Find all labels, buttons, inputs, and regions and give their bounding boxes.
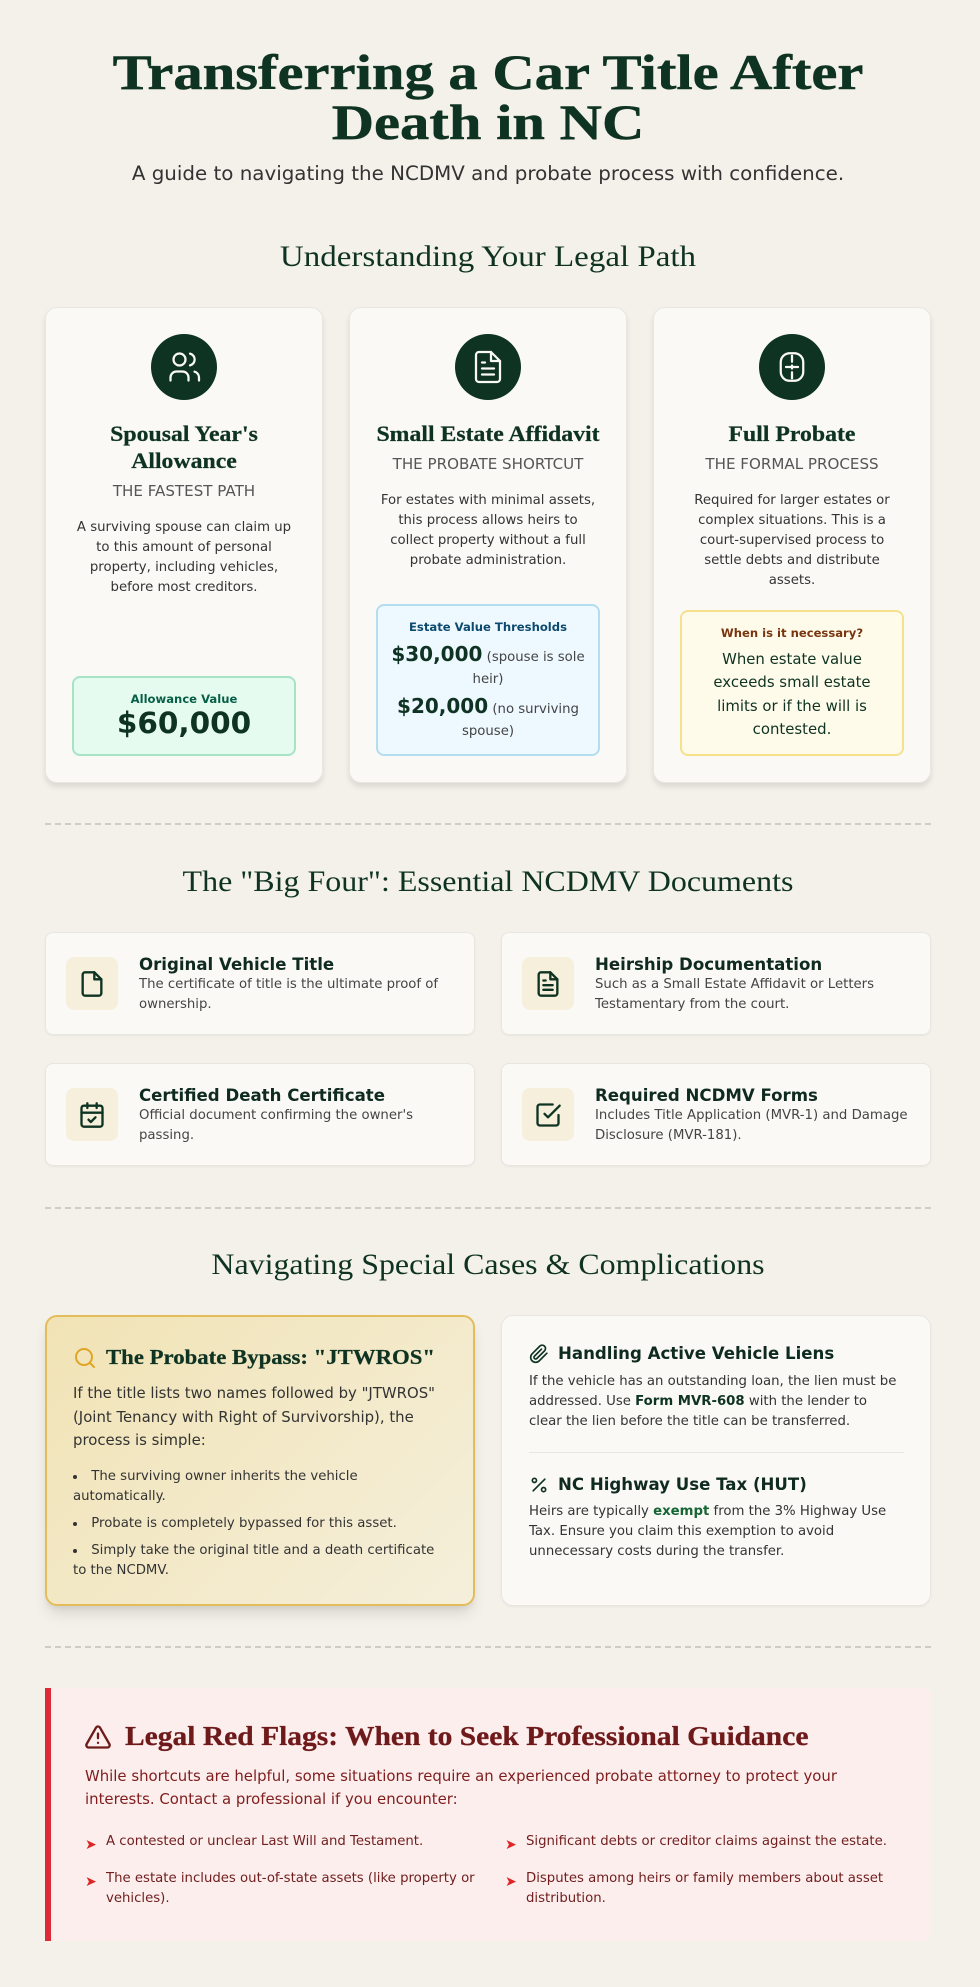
document name: Original Vehicle Title: [139, 955, 334, 974]
panel: spousal year's allowance: [45, 307, 323, 783]
flag text: [526, 1871, 883, 1906]
bullet list: automatically.: [73, 1489, 166, 1504]
callout: allowance value: [72, 676, 296, 756]
callout text: [713, 650, 871, 738]
title: [113, 44, 863, 150]
threshold: spouse: $30,000 (spouse is sole: [391, 642, 585, 666]
flag text: distribution.: [526, 1891, 606, 1906]
liens text: If the vehicle has an outstanding loan, the lien must be: [529, 1374, 896, 1389]
panel: original vehicle title: [45, 932, 475, 1035]
intro text: [85, 1767, 837, 1808]
arrow: ➤: [505, 1874, 517, 1890]
heading: legal path: Understanding Your Legal Path: [280, 240, 696, 273]
card description: For estates with minimal assets,: [381, 493, 595, 508]
card description: A surviving spouse can claim up: [77, 520, 291, 535]
card description: complex situations. This is a: [698, 513, 886, 528]
card description: assets.: [769, 573, 815, 588]
callout label: Allowance Value: [131, 692, 237, 706]
card heading: [110, 421, 258, 473]
callout amount: $60,000: [117, 706, 251, 740]
document name: Heirship Documentation: [595, 955, 822, 974]
document name: Required NCDMV Forms: [595, 1086, 818, 1105]
card description: to this amount of personal: [96, 540, 272, 555]
title: Transferring a Car Title After: [113, 44, 863, 100]
icon: paperclip: [530, 1344, 548, 1364]
card subtitle: THE FORMAL PROCESS: [705, 455, 879, 473]
callout text: exceeds small estate: [713, 673, 871, 691]
threshold: spouse: [391, 642, 585, 686]
card heading: Full Probate: [729, 421, 855, 446]
document description: [594, 977, 874, 1012]
icon: file: [66, 957, 118, 1010]
heading: big four: The "Big Four": Essential NCDMV Documents: [183, 865, 793, 898]
document description: Disclosure (MVR-181).: [595, 1128, 742, 1143]
card subtitle: THE FASTEST PATH: [113, 482, 255, 500]
title: Death in NC: [332, 94, 644, 150]
flag text: vehicles).: [106, 1891, 170, 1906]
flag text: Significant debts or creditor claims against the estate.: [526, 1834, 887, 1849]
document description: The certificate of title is the ultimate proof of: [139, 977, 438, 992]
document description: Includes Title Application (MVR-1) and Damage: [595, 1108, 908, 1123]
bullet list: Probate is completely bypassed for this asset.: [91, 1516, 397, 1531]
card description: [694, 493, 890, 588]
panel: liens and tax: [501, 1315, 931, 1606]
document description: passing.: [139, 1128, 194, 1143]
icon: warning triangle: [85, 1725, 111, 1749]
document description: Testamentary from the court.: [595, 997, 789, 1012]
bullet list: Simply take the original title and a death certificate: [91, 1543, 434, 1558]
panel: JTWROS bypass: [45, 1315, 475, 1606]
icon: search: [75, 1348, 95, 1368]
flag text: A contested or unclear Last Will and Testament.: [106, 1834, 423, 1849]
threshold: no spouse: $20,000 (no surviving: [397, 694, 579, 718]
flag text: The estate includes out-of-state assets (like property or: [106, 1871, 475, 1886]
callout: estate value thresholds: [376, 604, 600, 756]
red flag: disputes: [505, 1871, 883, 1906]
document description: [138, 977, 438, 1012]
card heading: Spousal Year's: [110, 421, 258, 446]
subtitle: A guide to navigating the NCDMV and probate process with confidence.: [132, 162, 844, 185]
panel: full probate: [653, 307, 931, 783]
liens text: addressed. Use Form MVR-608 with the lender to: [529, 1394, 867, 1409]
panel: small estate affidavit: [349, 307, 627, 783]
red flag: debts: [505, 1834, 887, 1853]
intro text: (Joint Tenancy with Right of Survivorship), the: [73, 1408, 414, 1426]
liens text: [529, 1374, 896, 1429]
bullet list: The surviving owner inherits the vehicle: [91, 1469, 358, 1484]
card description: before most creditors.: [111, 580, 257, 595]
threshold: spouse: heir): [473, 672, 503, 686]
panel heading: The Probate Bypass: "JTWROS": [106, 1345, 435, 1369]
document description: Such as a Small Estate Affidavit or Letters: [595, 977, 874, 992]
icon: formal process: [759, 334, 825, 400]
heading: special cases: Navigating Special Cases & Complications: [211, 1248, 765, 1281]
callout text: contested.: [753, 720, 831, 738]
panel heading: Legal Red Flags: When to Seek Professional Guidance: [125, 1721, 808, 1751]
card description: settle debts and distribute: [704, 553, 880, 568]
icon: percent: [532, 1478, 546, 1492]
card description: court-supervised process to: [700, 533, 884, 548]
card description: probate administration.: [410, 553, 566, 568]
intro text: If the title lists two names followed by "JTWROS": [73, 1384, 435, 1402]
tax text: Tax. Ensure you claim this exemption to avoid: [529, 1524, 834, 1539]
panel: death certificate: [45, 1063, 475, 1166]
document description: Official document confirming the owner's: [139, 1108, 413, 1123]
card heading: Allowance: [131, 448, 237, 473]
callout label: Estate Value Thresholds: [409, 620, 567, 634]
intro text: interests. Contact a professional if you encounter:: [85, 1790, 458, 1808]
card description: collect property without a full: [390, 533, 586, 548]
tax text: Heirs are typically exempt from the 3% Highway Use: [529, 1504, 886, 1519]
liens heading: Handling Active Vehicle Liens: [558, 1344, 834, 1363]
threshold: no spouse: spouse): [462, 724, 514, 739]
tax heading: NC Highway Use Tax (HUT): [558, 1475, 807, 1494]
icon: check square: [522, 1088, 574, 1141]
card description: this process allows heirs to: [398, 513, 578, 528]
arrow: ➤: [505, 1837, 517, 1853]
icon: users: [151, 334, 217, 400]
intro text: [73, 1384, 435, 1449]
card description: [77, 520, 291, 595]
arrow: ➤: [85, 1874, 97, 1890]
bullet list: to the NCDMV.: [73, 1563, 169, 1578]
red flag: out-of-state assets: [85, 1871, 475, 1906]
document name: Certified Death Certificate: [139, 1086, 385, 1105]
card subtitle: THE PROBATE SHORTCUT: [393, 455, 583, 473]
card description: [381, 493, 595, 568]
flag text: [106, 1871, 475, 1906]
icon: document: [455, 334, 521, 400]
bullet list: [73, 1469, 434, 1578]
panel: heirship documentation: [501, 932, 931, 1035]
liens text: clear the lien before the title can be transferred.: [529, 1414, 850, 1429]
callout label: When is it necessary?: [721, 626, 863, 640]
document description: [139, 1108, 413, 1143]
panel: legal red flags: [45, 1688, 931, 1941]
threshold: no spouse: [397, 694, 579, 739]
icon: calendar check: [66, 1088, 118, 1141]
flag text: Disputes among heirs or family members about asset: [526, 1871, 883, 1886]
card description: property, including vehicles,: [90, 560, 278, 575]
document description: ownership.: [139, 997, 212, 1012]
callout text: When estate value: [722, 650, 862, 668]
icon: file with text: [522, 957, 574, 1010]
arrow: ➤: [85, 1837, 97, 1853]
tax text: unnecessary costs during the transfer.: [529, 1544, 784, 1559]
panel: NCDMV forms: [501, 1063, 931, 1166]
document description: [595, 1108, 908, 1143]
card description: Required for larger estates or: [694, 493, 890, 508]
tax text: [528, 1504, 886, 1559]
intro text: process is simple:: [73, 1431, 206, 1449]
red flag: contested will: [85, 1834, 423, 1853]
callout: when necessary: [680, 610, 904, 756]
callout text: limits or if the will is: [717, 697, 867, 715]
intro text: While shortcuts are helpful, some situations require an experienced probate attorney to protect your: [85, 1767, 837, 1785]
card heading: Small Estate Affidavit: [376, 421, 600, 446]
